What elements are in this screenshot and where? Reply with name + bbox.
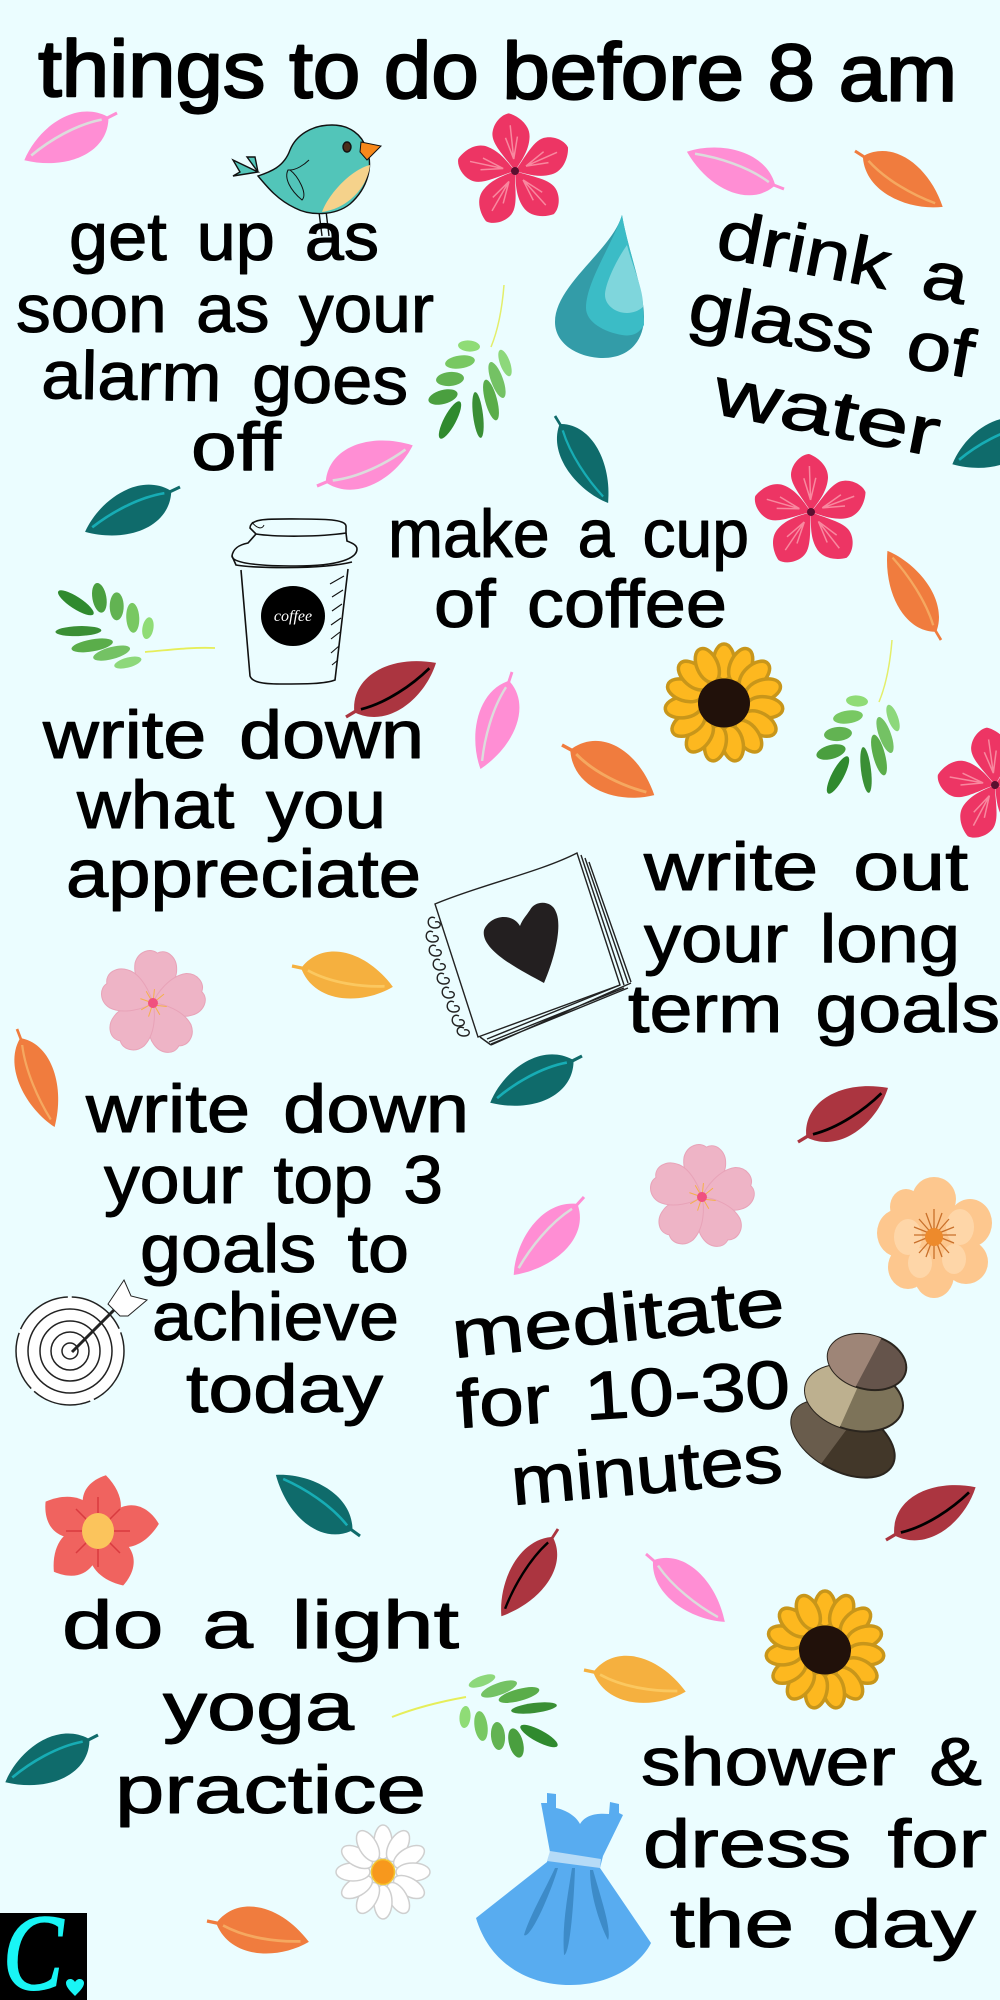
text: write down your top 3 goals to achieve today: your top 3 xyxy=(104,1142,443,1218)
leaf: teal right edge xyxy=(943,402,1000,485)
flower: sunflower lower xyxy=(765,1591,885,1710)
text: drink a glass of water: water xyxy=(707,353,946,471)
leaf: red beside cup xyxy=(334,643,447,735)
text: do a light yoga practice: yoga xyxy=(163,1669,354,1745)
icon: blue dress xyxy=(476,1793,651,1985)
text: write out your long term goals xyxy=(628,829,1000,1047)
flower: sunflower upper xyxy=(664,644,784,763)
icon: bird xyxy=(233,125,381,236)
text: write down what you appreciate: write down xyxy=(42,697,424,773)
text: write down what you appreciate: what you xyxy=(76,767,386,843)
icon: stacked stones xyxy=(790,1332,908,1479)
flower: pink left xyxy=(91,945,214,1064)
flower: coral xyxy=(35,1471,160,1593)
text: drink a glass of water xyxy=(683,196,980,471)
text: shower and dress for the day xyxy=(641,1724,987,1962)
text: meditate for 10-30 minutes: meditate xyxy=(448,1264,788,1373)
leaf: teal bottom left xyxy=(0,1717,108,1802)
title: things to do before 8 am xyxy=(38,24,957,118)
text: get up as soon as your alarm goes off: soon as your xyxy=(16,271,434,347)
text: drink a glass of water: drink a xyxy=(711,196,975,319)
text: write out your long term goals: your long xyxy=(644,901,960,977)
text: write down what you appreciate xyxy=(42,697,424,912)
text: get up as soon as your alarm goes off: get up as xyxy=(69,199,379,275)
text: meditate for 10-30 minutes xyxy=(448,1264,792,1520)
fern: beside cup xyxy=(49,578,215,674)
text: shower and dress for the day: the day xyxy=(670,1886,976,1962)
flower: red hibiscus right edge xyxy=(927,719,1000,851)
leaf: pink narrow xyxy=(463,666,532,775)
text: meditate for 10-30 minutes: minutes xyxy=(508,1421,785,1520)
text: shower and dress for the day: shower & xyxy=(641,1724,982,1800)
icon: coffee cup: coffee xyxy=(274,608,312,625)
text: do a light yoga practice: practice xyxy=(115,1752,426,1828)
icon: coffee cup xyxy=(232,519,357,684)
text: get up as soon as your alarm goes off: off xyxy=(191,409,281,485)
leaf: pink top right xyxy=(679,134,791,209)
leaf: pink top left xyxy=(15,95,127,180)
leaf: red lower right xyxy=(874,1467,986,1558)
leaf: teal centre xyxy=(540,406,625,512)
leaf: red lower middle xyxy=(486,1519,575,1627)
leaf: teal lower xyxy=(263,1459,371,1553)
text: write out your long term goals: write out xyxy=(643,829,968,905)
leaf: pink middle xyxy=(499,1184,600,1289)
text: write down your top 3 goals to achieve today: achieve xyxy=(152,1279,399,1355)
flower: red hibiscus top xyxy=(448,107,582,235)
text: get up as soon as your alarm goes off xyxy=(16,199,434,485)
text: write down your top 3 goals to achieve today xyxy=(85,1071,469,1427)
text: make a cup of coffee xyxy=(388,496,749,642)
text: shower and dress for the day: dress for xyxy=(643,1806,987,1882)
leaf: teal middle xyxy=(481,1038,592,1123)
text: meditate for 10-30 minutes: for 10-30 xyxy=(454,1346,792,1443)
text: drink a glass of water: glass of xyxy=(683,268,980,393)
text: write down your top 3 goals to achieve today: today xyxy=(186,1351,383,1427)
fern: right xyxy=(815,640,902,796)
text: do a light yoga practice xyxy=(62,1587,459,1828)
text: write down your top 3 goals to achieve today: goals to xyxy=(140,1211,409,1287)
icon: target with arrow xyxy=(16,1280,147,1405)
text: make a cup of coffee: of coffee xyxy=(434,566,727,642)
text: write out your long term goals: term goals xyxy=(628,971,1000,1047)
leaf: pink near alarm text xyxy=(308,424,421,505)
icon: water drop xyxy=(555,215,644,358)
leaf: orange top right xyxy=(845,133,954,223)
leaf: orange bottom xyxy=(203,1898,314,1963)
text: write down your top 3 goals to achieve today: write down xyxy=(85,1071,469,1147)
icon: notebook with heart xyxy=(426,853,631,1045)
flower: daisy xyxy=(336,1825,430,1919)
leaf: orange left edge xyxy=(1,1022,73,1133)
leaf: orange centre xyxy=(551,723,666,815)
flower: red hibiscus centre xyxy=(748,452,874,572)
leaf: yellow lower xyxy=(580,1647,691,1713)
fern: lower xyxy=(392,1672,560,1759)
leaf: yellow xyxy=(288,943,398,1008)
text: write down what you appreciate: appreciate xyxy=(66,836,421,912)
leaf: pink lower xyxy=(634,1538,738,1636)
leaf: red right xyxy=(786,1068,899,1160)
text: get up as soon as your alarm goes off: alarm goes xyxy=(41,337,409,419)
flower: peach xyxy=(877,1177,992,1298)
text: do a light yoga practice: do a light xyxy=(62,1587,459,1663)
text: make a cup of coffee: make a cup xyxy=(388,496,749,572)
leaf: teal left xyxy=(76,469,190,552)
fern: beside alarm text xyxy=(427,285,514,441)
flower: pink middle xyxy=(640,1139,763,1258)
leaf: orange right xyxy=(871,542,956,650)
